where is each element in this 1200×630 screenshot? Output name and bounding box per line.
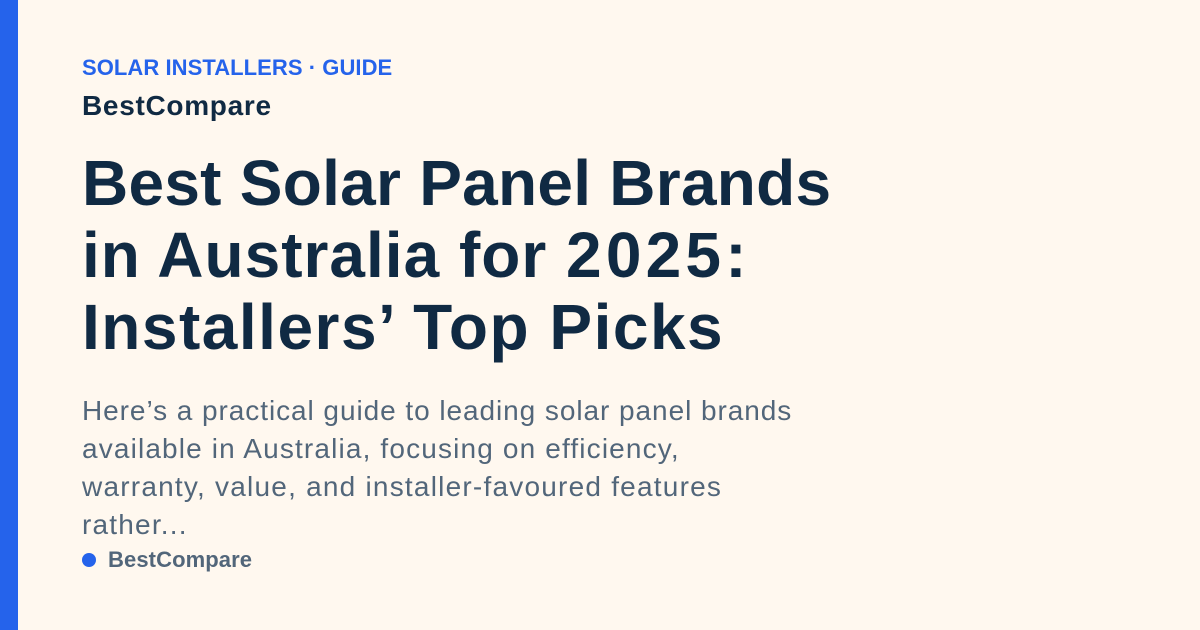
description: warranty, value, and installer-favoured features: [82, 471, 722, 502]
description: rather...: [82, 509, 188, 540]
description: Here’s a practical guide to leading solar panel brands: [82, 395, 792, 426]
title: in Australia for 2025:: [82, 219, 751, 291]
source line: [82, 547, 252, 572]
title: Best Solar Panel Brands: [82, 147, 831, 219]
eyebrow label: SOLAR INSTALLERS · GUIDE: [82, 55, 392, 80]
brand name: BestCompare: [82, 90, 272, 121]
description: available in Australia, focusing on efficiency,: [82, 433, 680, 464]
title: Installers’ Top Picks: [82, 291, 724, 363]
accent bar: [0, 0, 18, 630]
title: [82, 147, 831, 363]
source dot: [82, 553, 96, 567]
source name: BestCompare: [108, 547, 252, 572]
description: [82, 395, 792, 540]
